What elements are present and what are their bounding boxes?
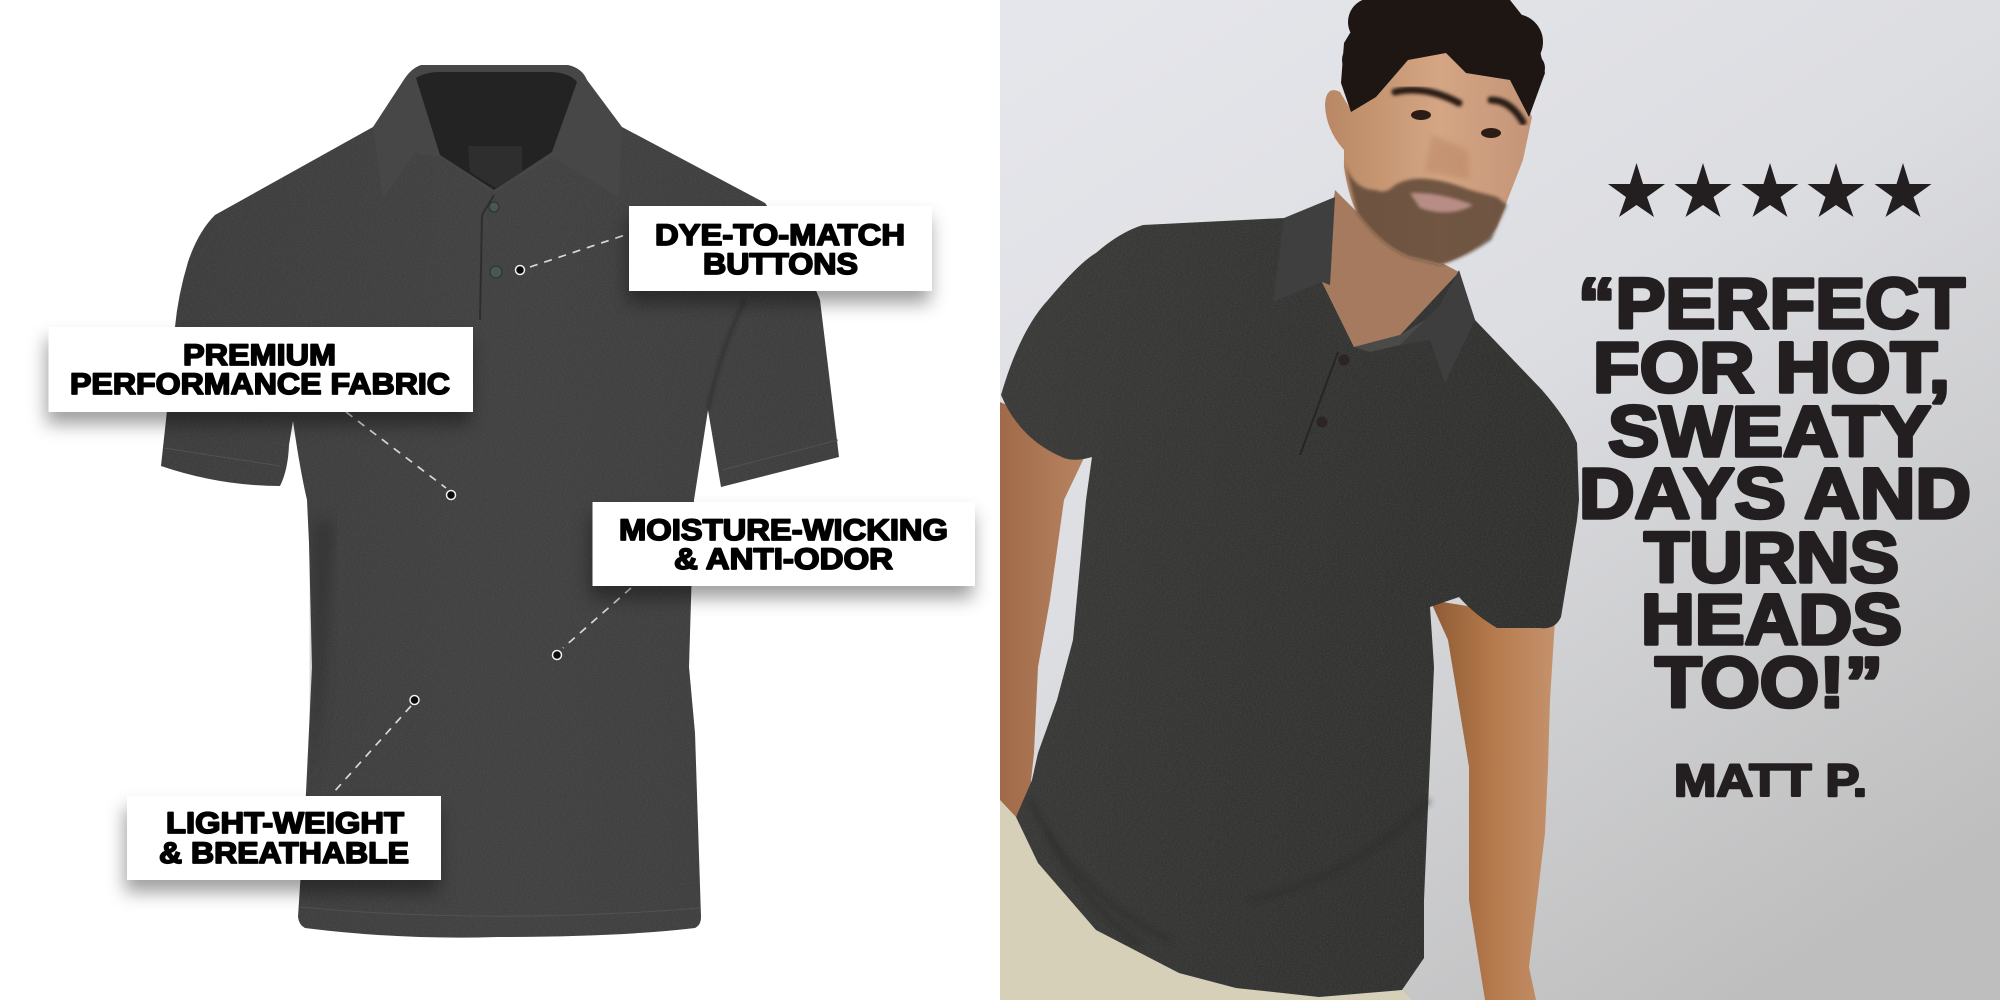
callout: dye-to-match buttons (629, 206, 932, 291)
review quote: SWEATY (1608, 393, 1931, 472)
right arm (1430, 600, 1555, 1000)
callout: moisture-wicking and anti-odor: MOISTURE-WICKING (619, 514, 948, 547)
leader: premium performance fabric (346, 412, 456, 500)
garment tag (468, 146, 522, 188)
review quote (1578, 265, 1971, 723)
polo body (1001, 218, 1579, 997)
callout: dye-to-match buttons: DYE-TO-MATCH (655, 219, 905, 252)
polo placket (1300, 352, 1338, 455)
hair (1341, 0, 1545, 117)
callout: premium performance fabric: PERFORMANCE FABRIC (70, 368, 450, 401)
panel: product polo shirt (161, 65, 839, 938)
leader: moisture-wicking (552, 588, 631, 660)
callout: premium performance fabric (48, 327, 473, 412)
side fold shading (312, 520, 335, 790)
polo buttons (1316, 354, 1350, 428)
callout: moisture-wicking and anti-odor: & ANTI-ODOR (674, 543, 893, 576)
leader: dye-to-match buttons (516, 234, 628, 274)
face (1325, 40, 1532, 265)
review quote: TOO!” (1655, 644, 1883, 723)
left arm (1000, 402, 1090, 817)
review quote: “PERFECT (1578, 265, 1965, 344)
review quote: TURNS (1644, 519, 1899, 598)
callout: light-weight and breathable: & BREATHABLE (159, 837, 409, 870)
polo collar left (1273, 197, 1335, 302)
photo: model wearing polo (1000, 0, 1579, 1000)
review quote: FOR HOT, (1593, 329, 1950, 408)
panel: testimonial background (1000, 0, 2000, 1000)
khaki pants (1000, 800, 1412, 1000)
collar (373, 65, 622, 198)
callout: light-weight and breathable (127, 796, 441, 880)
callout: light-weight and breathable: LIGHT-WEIGHT (166, 807, 404, 840)
neck (1322, 190, 1459, 347)
shirt body and sleeves (161, 127, 839, 938)
callout: moisture-wicking and anti-odor (592, 502, 975, 586)
polo inner neck (1354, 320, 1425, 352)
nose shading (1425, 135, 1470, 180)
eyes and brows (1395, 90, 1523, 138)
callout: dye-to-match buttons: BUTTONS (703, 248, 858, 281)
polo collar right (1400, 270, 1475, 383)
reviewer name: MATT P. (1674, 755, 1867, 806)
fabric folds (1030, 800, 1430, 945)
star rating (1608, 163, 1932, 217)
placket (480, 195, 494, 320)
review quote: DAYS AND (1579, 455, 1971, 534)
hem stitching (164, 440, 838, 916)
callout: premium performance fabric: PREMIUM (183, 339, 336, 372)
armhole shading (708, 300, 745, 410)
beard (1344, 160, 1507, 265)
inner neck (416, 72, 577, 190)
leader: light-weight (333, 696, 419, 793)
panel: product background (0, 0, 1000, 1000)
shirt buttons (489, 202, 502, 278)
lips (1410, 193, 1473, 212)
review quote: HEADS (1641, 581, 1902, 660)
